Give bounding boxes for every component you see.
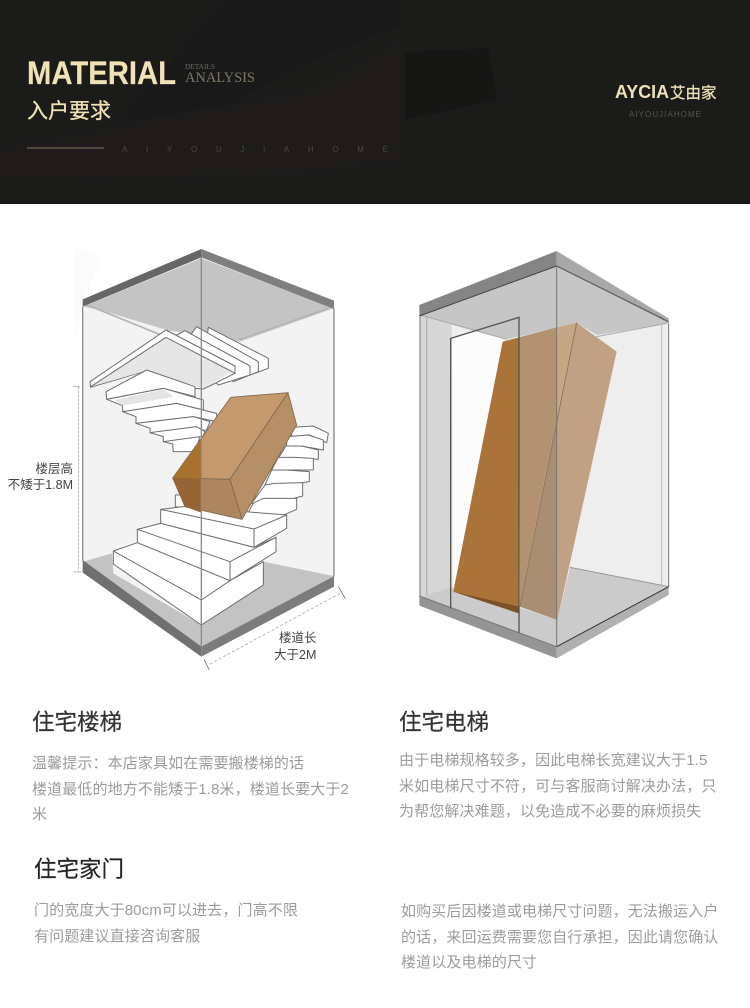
text: elevator notes: 由于电梯规格较多，因此电梯长宽建议大于1.5 xyxy=(399,752,708,769)
upper flight steps xyxy=(106,370,195,399)
label: floor height xyxy=(8,461,73,492)
text: shipping notes: 如购买后因楼道或电梯尺寸问题，无法搬运入户 xyxy=(401,903,719,920)
top band xyxy=(419,251,557,316)
rear upper landings xyxy=(207,327,268,375)
text: elevator notes xyxy=(399,752,717,820)
text: stair notes: 米 xyxy=(32,806,47,823)
ceiling xyxy=(83,258,333,342)
glass edges xyxy=(83,257,334,647)
lower steps xyxy=(175,495,200,510)
label: corridor length: 楼道长 xyxy=(279,630,317,645)
top band xyxy=(83,249,201,307)
heading: 住宅家门: 住宅家门 xyxy=(34,857,124,882)
heading: 住宅楼梯: 住宅楼梯 xyxy=(32,710,122,735)
text: door notes: 有问题建议直接咨询客服 xyxy=(34,928,200,944)
illustration: elevator box xyxy=(419,251,669,658)
subtitle: 入户要求: 入户要求 xyxy=(27,100,111,123)
logo xyxy=(615,82,717,119)
label: corridor length xyxy=(274,630,317,662)
title: MATERIAL: MATERIAL xyxy=(27,55,176,91)
text: stair notes: 温馨提示：本店家具如在需要搬楼梯的话 xyxy=(32,755,304,772)
text: stair notes: 楼道最低的地方不能矮于1.8米，楼道长要大于2 xyxy=(32,780,349,798)
upper landing xyxy=(90,330,235,389)
text: stair notes xyxy=(32,755,349,823)
text: elevator notes: 米如电梯尺寸不符，可与客服商讨解决办法，只 xyxy=(399,778,717,794)
label: floor height: 楼层高 xyxy=(35,461,73,476)
label: ANALYSIS: ANALYSIS xyxy=(185,70,255,86)
floor xyxy=(420,567,669,647)
bottom band xyxy=(419,596,557,658)
label: corridor length: 大于2M xyxy=(274,648,316,662)
box xyxy=(173,393,297,519)
label: floor height: 不矮于1.8M xyxy=(8,478,73,492)
text: shipping notes: 的话，来回运费需要您自行承担，因此请您确认 xyxy=(401,928,719,946)
walls xyxy=(83,257,334,647)
cabin walls xyxy=(420,266,669,647)
glass edges xyxy=(420,266,669,647)
text: door notes: 门的宽度大于80cm可以进去，门高不限 xyxy=(34,902,298,919)
bottom band xyxy=(83,560,201,657)
logo: AYCIA xyxy=(615,82,669,102)
lower right flight xyxy=(292,426,328,443)
ceiling xyxy=(420,266,669,339)
text: door notes xyxy=(34,902,298,944)
logo: AIYOUJIAHOME xyxy=(629,110,701,119)
floor xyxy=(83,553,333,647)
heading: 住宅电梯: 住宅电梯 xyxy=(399,710,489,735)
box xyxy=(453,323,617,620)
text: elevator notes: 为帮您解决难题，以免造成不必要的麻烦损失 xyxy=(399,803,701,820)
text: shipping notes xyxy=(401,903,719,971)
header banner xyxy=(0,0,750,204)
door frame xyxy=(451,317,519,633)
logo: 艾由家 xyxy=(670,84,717,102)
text: shipping notes: 楼道以及电梯的尺寸 xyxy=(401,954,537,971)
dimension lines xyxy=(73,387,345,670)
brand spaced text: AIYOUJIAHOME xyxy=(122,145,388,154)
label: DETAILS: DETAILS xyxy=(185,62,215,71)
